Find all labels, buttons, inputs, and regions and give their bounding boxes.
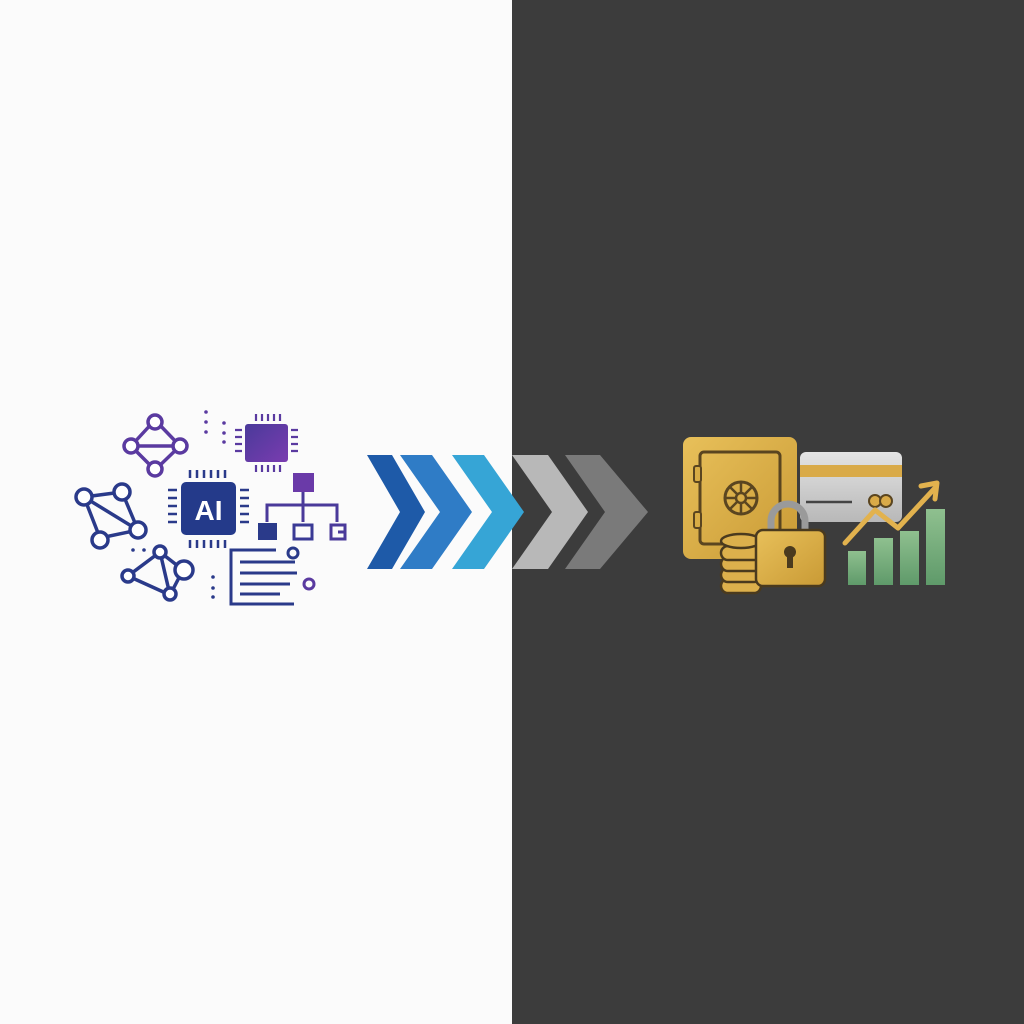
- background right dark panel: [512, 0, 1024, 1024]
- icon cluster: AI technology: [76, 410, 345, 604]
- background left: [0, 0, 512, 1024]
- bar chart: [848, 509, 945, 585]
- icon: AI chip: [168, 470, 249, 548]
- icon: AI chip: AI: [194, 495, 222, 526]
- icon: coins: [721, 534, 761, 593]
- icon: processor chip: [235, 414, 298, 472]
- icon: hierarchy: [258, 473, 345, 540]
- icon: triangle network: [122, 546, 193, 600]
- icon: padlock: [756, 504, 825, 586]
- icon cluster: finance: [683, 437, 945, 593]
- icon: trend arrow: [845, 483, 937, 543]
- icon: credit card: [800, 452, 902, 522]
- icon: left network: [76, 484, 146, 548]
- icon: dots: [131, 410, 226, 599]
- icon: document: [231, 548, 314, 604]
- icon: safe: [683, 437, 797, 559]
- arrows: chevrons: [367, 455, 648, 569]
- icon: diamond network: [124, 415, 187, 476]
